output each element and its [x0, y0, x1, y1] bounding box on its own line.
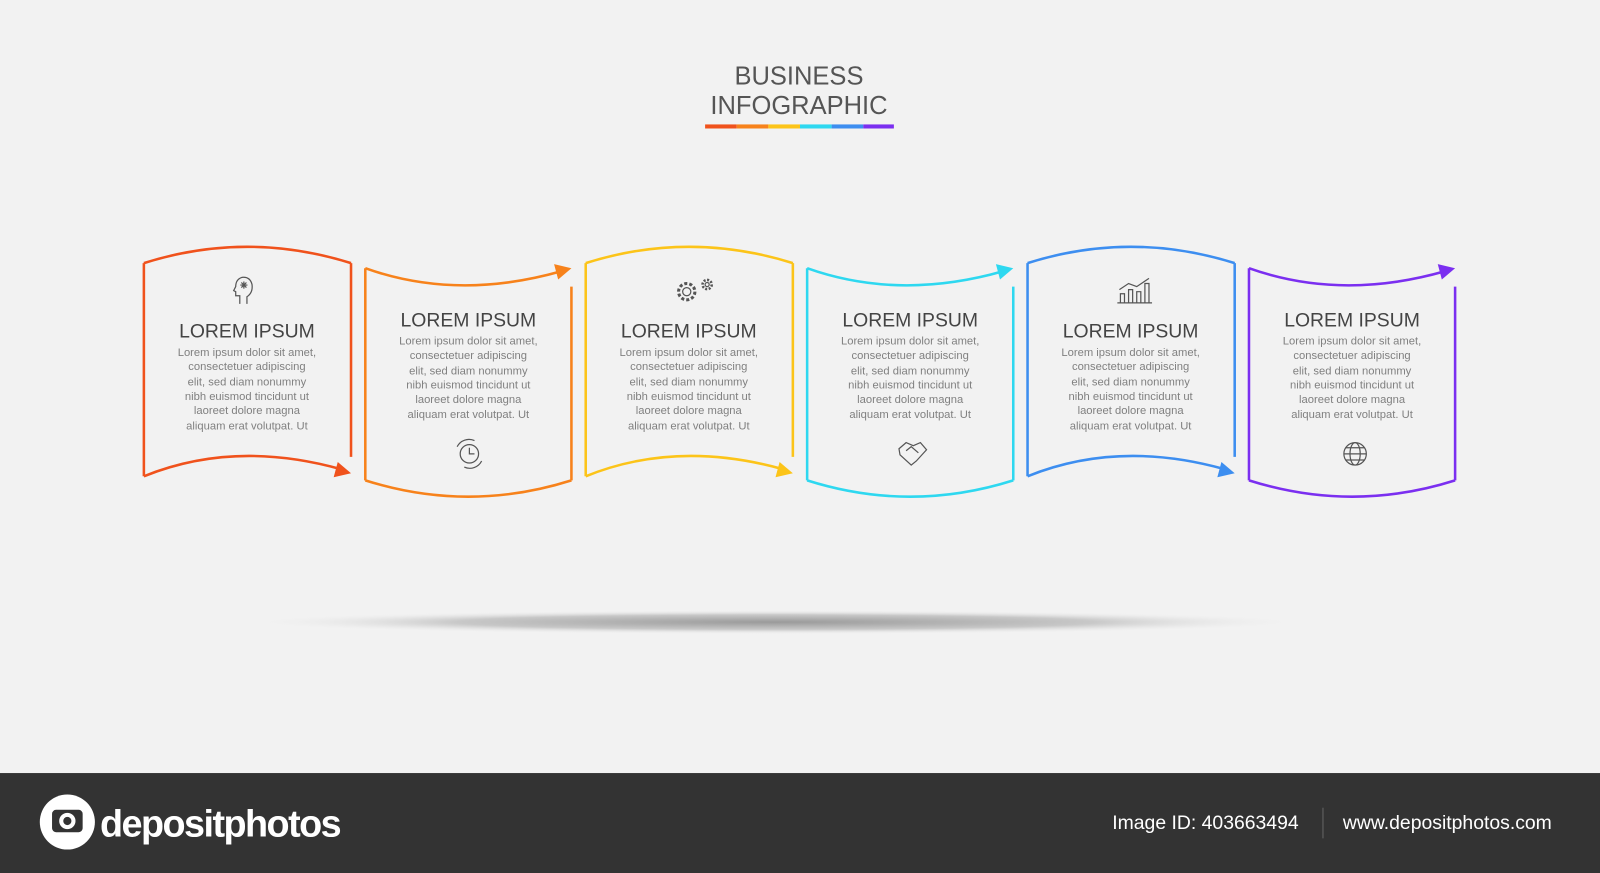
- panel 4: aliquam erat volutpat. Ut: [849, 409, 972, 421]
- floor shadow: [245, 610, 1306, 634]
- panel 3: consectetuer adipiscing: [630, 361, 747, 373]
- footer logo: [40, 794, 341, 850]
- footer id: www.depositphotos.com: [1342, 812, 1552, 834]
- panel 2: elit, sed diam nonummy: [409, 365, 528, 377]
- icon: clock: [457, 439, 482, 468]
- icon: bar chart: [1117, 278, 1152, 303]
- footer id: [1112, 808, 1552, 838]
- panel 4: consectetuer adipiscing: [852, 350, 969, 362]
- text: elit, sed diam nonummy: [188, 377, 307, 389]
- panel 3: elit, sed diam nonummy: [630, 377, 748, 389]
- icon: gears: [679, 280, 712, 300]
- footer id: Image ID: 403663494: [1112, 812, 1299, 834]
- text: consectetuer adipiscing: [188, 361, 306, 373]
- title: INFOGRAPHIC: [710, 92, 888, 120]
- text: aliquam erat volutpat. Ut: [186, 420, 309, 432]
- panel 5: Lorem ipsum dolor sit amet,: [1061, 347, 1200, 359]
- text: LOREM IPSUM: [179, 321, 315, 343]
- icon: globe: [1344, 443, 1366, 465]
- text: [178, 321, 316, 432]
- panel 3: nibh euismod tincidunt ut: [627, 391, 752, 403]
- footer bar: [0, 773, 1600, 873]
- panel 6: consectetuer adipiscing: [1293, 350, 1411, 362]
- title color bar: [705, 124, 894, 129]
- text: Lorem ipsum dolor sit amet,: [178, 347, 316, 359]
- panel 5: [1028, 247, 1235, 477]
- panel 3: Lorem ipsum dolor sit amet,: [620, 347, 758, 359]
- panel 3: [586, 247, 793, 477]
- panel 2: laoreet dolore magna: [415, 394, 522, 406]
- footer logo: depositphotos: [100, 802, 341, 844]
- panel 4: [807, 264, 1013, 497]
- panel 6: nibh euismod tincidunt ut: [1290, 380, 1415, 392]
- panel 4: LOREM IPSUM: [842, 309, 978, 331]
- panel 5: aliquam erat volutpat. Ut: [1070, 420, 1192, 432]
- text: laoreet dolore magna: [194, 405, 301, 417]
- panel 2: consectetuer adipiscing: [410, 350, 527, 362]
- panel 2: aliquam erat volutpat. Ut: [408, 409, 530, 421]
- panel 4: Lorem ipsum dolor sit amet,: [841, 336, 979, 348]
- title: BUSINESS: [734, 63, 863, 91]
- panel 2: Lorem ipsum dolor sit amet,: [399, 336, 538, 348]
- panel 3: aliquam erat volutpat. Ut: [628, 420, 750, 432]
- panel 6: elit, sed diam nonummy: [1293, 365, 1412, 377]
- panel 5: elit, sed diam nonummy: [1071, 377, 1190, 389]
- panel 6: Lorem ipsum dolor sit amet,: [1283, 336, 1421, 348]
- panel 2: [365, 264, 571, 497]
- panel 6: aliquam erat volutpat. Ut: [1291, 409, 1414, 421]
- panel 2: nibh euismod tincidunt ut: [406, 380, 531, 392]
- icon: head: [234, 277, 252, 304]
- panel 3: laoreet dolore magna: [636, 405, 743, 417]
- icon: handshake: [899, 443, 927, 465]
- panel 2: LOREM IPSUM: [401, 309, 536, 331]
- panel 5: nibh euismod tincidunt ut: [1069, 391, 1194, 403]
- panel 5: laoreet dolore magna: [1078, 405, 1184, 417]
- panel 6: laoreet dolore magna: [1299, 394, 1406, 406]
- panel 4: elit, sed diam nonummy: [851, 365, 970, 377]
- panel 1: [144, 247, 351, 477]
- panel 4: nibh euismod tincidunt ut: [848, 380, 973, 392]
- panel 3: LOREM IPSUM: [621, 321, 757, 343]
- panel 6: [1249, 264, 1455, 497]
- panel 5: LOREM IPSUM: [1063, 321, 1198, 343]
- panel 4: laoreet dolore magna: [857, 394, 964, 406]
- panel 5: consectetuer adipiscing: [1072, 361, 1189, 373]
- title: [710, 63, 888, 120]
- text: nibh euismod tincidunt ut: [185, 391, 310, 403]
- panel 6: LOREM IPSUM: [1284, 309, 1420, 331]
